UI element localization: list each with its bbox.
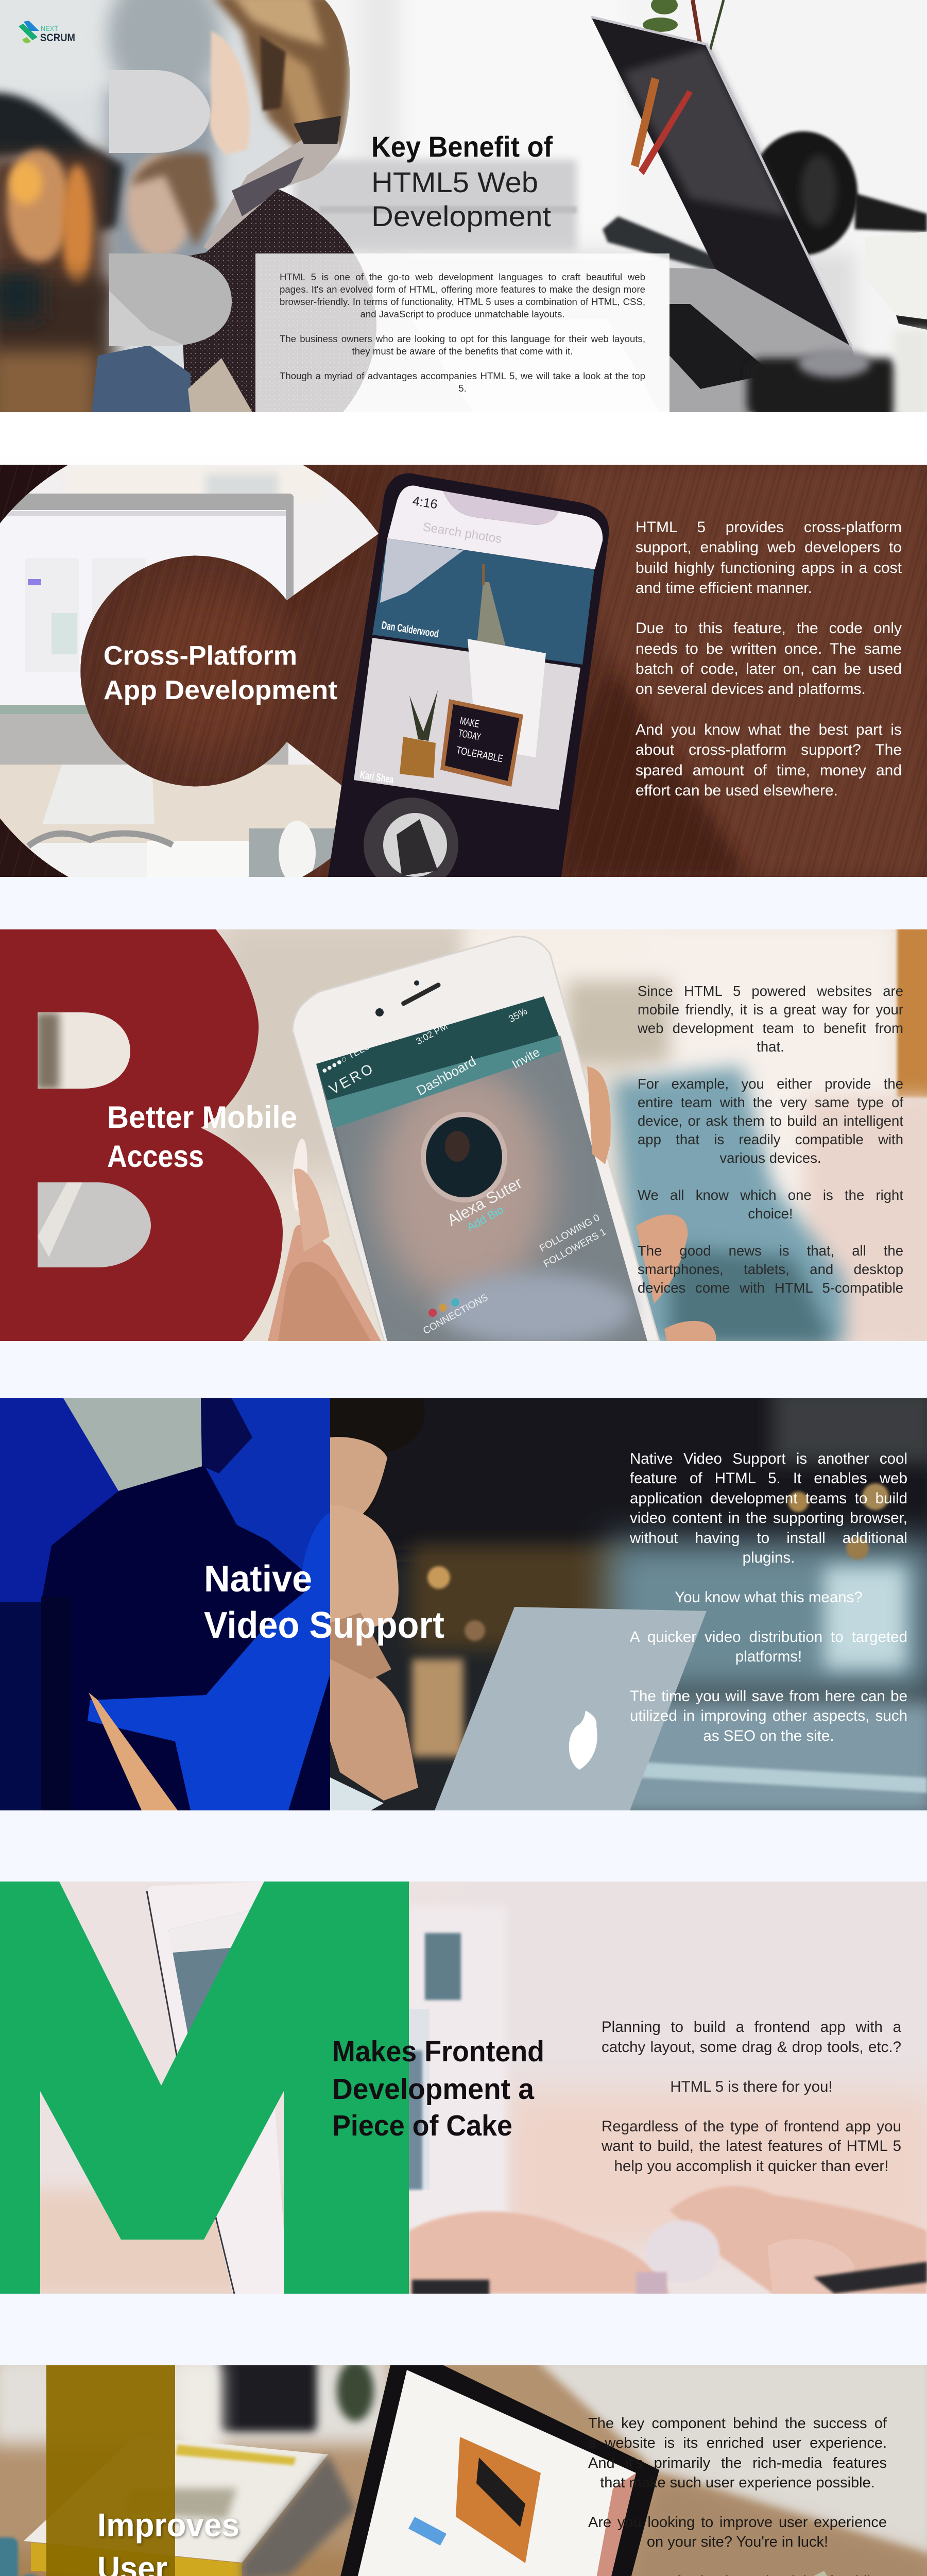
cross-platform text: and time efficient manner. [636, 580, 812, 597]
cross-platform text: Due to this feature, the code only [636, 620, 902, 637]
user experience illustration [0, 2365, 927, 2576]
native video text: plugins. [743, 1549, 795, 1566]
title [204, 1558, 444, 1646]
mobile access text [638, 983, 903, 1296]
mobile access text: web development team to benefit from [638, 1020, 903, 1036]
title: Development a [332, 2073, 535, 2106]
phone labels: Alexa Suter [444, 1174, 525, 1229]
notch [443, 491, 559, 525]
icon: laptop [77, 2365, 659, 2576]
intro text [280, 272, 645, 394]
mobile access text: mobile friendly, it is a great way for your [638, 1002, 903, 1018]
phone labels: FOLLOWERS 1 [542, 1226, 608, 1269]
intro text: they must be aware of the benefits that come with it. [352, 346, 573, 357]
mobile access text: For example, you either provide the [638, 1076, 903, 1092]
title: Video Support [204, 1605, 444, 1646]
title [97, 2506, 270, 2576]
native video text: You know what this means? [675, 1589, 863, 1606]
earpiece [401, 982, 441, 1007]
cross-platform text: support, enabling web developers to [636, 539, 902, 556]
intro text: HTML 5 is one of the go-to web development languages to craft beautiful web [280, 272, 645, 282]
frontend text: Planning to build a frontend app with a [602, 2019, 901, 2036]
yellow overlay band [46, 2365, 175, 2576]
intro text: 5. [458, 383, 467, 394]
top photo: statue [372, 538, 594, 665]
native video text: without having to install additional [630, 1530, 907, 1547]
native video text: utilized in improving other aspects, such [630, 1707, 907, 1724]
semi-transparent text panel [255, 253, 670, 412]
man, skin tones right of overlay [330, 1398, 425, 1810]
native video text [630, 1450, 907, 1744]
mobile access text: devices come with HTML 5-compatible [638, 1280, 903, 1296]
phone labels: Search photos [422, 520, 503, 546]
screen header [316, 996, 559, 1100]
title: Improves [97, 2506, 239, 2544]
phone labels: ●●●●○ TELUS LTE [319, 1028, 393, 1076]
panel: native video support [0, 1398, 927, 1810]
phone labels: Dan Calderwood [381, 619, 439, 640]
native video illustration [0, 1398, 927, 1810]
user experience text: a website is its enriched user experience. [588, 2435, 887, 2451]
native video text: The time you will save from here can be [630, 1688, 907, 1705]
frontend text: HTML 5 is there for you! [670, 2078, 833, 2095]
small gem icons [428, 1298, 459, 1317]
photo: people clipped to letter B [0, 0, 391, 433]
blurred cafe background [330, 1381, 927, 1819]
frontend text [602, 2018, 901, 2176]
phone labels: 35% [507, 1006, 529, 1025]
headphones and dark keyboard [603, 131, 927, 273]
bottom circle [364, 798, 458, 892]
cross-platform text: And you know what the best part is [636, 721, 902, 738]
user experience text: The key component behind the success of [588, 2415, 887, 2432]
cross-platform text: about cross-platform support? The [636, 741, 902, 758]
title [332, 2035, 544, 2142]
native video text: A quicker video distribution to targeted [630, 1629, 907, 1646]
avatar [421, 1112, 507, 1202]
right fingers [587, 1066, 716, 1341]
mobile access text: app that is readily compatible with [638, 1131, 903, 1147]
phone labels: Kari Shea [359, 769, 394, 786]
frontend text: want to build, the latest features of HTML 5 [602, 2138, 901, 2155]
mobile access text: device, or ask them to build an intelligent [638, 1113, 903, 1129]
native video text: video content in the supporting browser, [630, 1510, 907, 1527]
phone labels: VERO [327, 1060, 377, 1097]
mobile access text: choice! [748, 1206, 793, 1222]
mobile access text: Since HTML 5 powered websites are [638, 983, 903, 999]
title: HTML5 Web [371, 166, 538, 198]
hands and watch [409, 2186, 927, 2295]
intro text: and JavaScript to produce unmatchable layouts. [360, 309, 564, 319]
phone labels: MAKE [459, 715, 480, 730]
panel: intro hero [0, 0, 927, 412]
user experience text: Are you looking to improve user experience [588, 2514, 887, 2531]
frontend text: help you accomplish it quicker than ever! [614, 2158, 888, 2174]
phone labels: TOLERABLE [455, 744, 504, 765]
blurred room background [0, 917, 927, 1350]
mobile access illustration [0, 929, 927, 1341]
hero illustration with heading [0, 0, 927, 412]
intro text: Though a myriad of advantages accompanies HTML 5, we will take a look at the top [280, 370, 645, 381]
screen body [316, 996, 647, 1341]
panel: improves user experience [0, 2365, 927, 2576]
intro text: browser-friendly. In terms of functionality, HTML 5 uses a combination of HTML, CSS, [280, 296, 645, 307]
phone labels: FOLLOWING 0 [538, 1212, 602, 1254]
frontend text: catchy layout, some drag & drop tools, etc.? [602, 2038, 901, 2056]
bottom photo: letter board [354, 638, 580, 810]
user experience text: that make such user experience possible. [600, 2475, 875, 2491]
cross-platform text: HTML 5 provides cross-platform [636, 519, 902, 536]
desk background with books [109, 0, 855, 417]
phone labels: TODAY [457, 727, 482, 743]
native video text: as SEO on the site. [703, 1727, 834, 1744]
frontend text: Regardless of the type of frontend app you [602, 2117, 901, 2135]
mobile access text: smartphones, tablets, and desktop [638, 1261, 903, 1277]
phone labels: Invite [510, 1045, 542, 1072]
title: Better Mobile [107, 1100, 297, 1134]
phone labels: 4:16 [411, 494, 439, 512]
mobile access text: entire team with the very same type of [638, 1094, 903, 1110]
mobile access text: The good news is that, all the [638, 1243, 903, 1259]
left hand [268, 1138, 381, 1341]
book stack [24, 2436, 355, 2576]
cross-platform text [636, 519, 902, 799]
blue overlay letter N with man [0, 1398, 330, 1810]
title: App Development [104, 675, 337, 705]
cross-platform text: spared amount of time, money and [636, 762, 902, 779]
phone screen header [387, 486, 603, 569]
title: Development [371, 200, 551, 232]
logo [19, 21, 75, 44]
title: Piece of Cake [332, 2109, 512, 2142]
mug left [0, 2537, 44, 2576]
cross-platform text: effort can be used elsewhere. [636, 782, 838, 799]
phone labels: CONNECTIONS [421, 1292, 490, 1336]
panel: cross-platform [0, 465, 927, 877]
icon: laptop [435, 1607, 707, 1810]
panel: makes frontend development [0, 1882, 927, 2294]
mobile access text: various devices. [719, 1150, 821, 1166]
icon: laptop [591, 17, 860, 412]
wood background [0, 465, 927, 877]
copper cup with pen [814, 2571, 918, 2576]
native video text: feature of HTML 5. It enables web [630, 1470, 907, 1487]
phone labels: Dashboard [414, 1053, 478, 1098]
title [107, 1100, 297, 1174]
logo: NEXT [41, 24, 58, 32]
native video text: platforms! [735, 1648, 802, 1665]
photo: desktop computer clipped to letter C [0, 465, 412, 885]
user experience text [588, 2414, 887, 2576]
intro text: pages. It's an evolved form of HTML, offering more features to make the design more [280, 284, 645, 295]
phone [293, 937, 659, 1345]
cross-platform text: batch of code, later on, can be used [636, 660, 902, 677]
letter M [0, 1882, 409, 2294]
cross-platform text: build highly functioning apps in a cost [636, 560, 902, 577]
native video text: application development teams to build [630, 1490, 907, 1507]
title: Access [107, 1139, 204, 1174]
plant [643, 0, 724, 52]
cross-platform text: on several devices and platforms. [636, 681, 866, 698]
phone labels: Add Bio [465, 1203, 506, 1233]
mobile access text: We all know which one is the right [638, 1187, 903, 1203]
cross-platform illustration [0, 465, 927, 877]
mobile access text: that. [757, 1039, 784, 1055]
phone labels [359, 494, 504, 786]
title: Native [204, 1558, 312, 1600]
letter B [0, 929, 283, 1341]
laptop behind letter [147, 1882, 288, 2294]
phone [328, 473, 609, 892]
title [371, 130, 553, 232]
title: Key Benefit of [371, 130, 553, 163]
native video text: Native Video Support is another cool [630, 1450, 907, 1467]
user experience text: on your site? You're in luck! [647, 2534, 828, 2550]
phone labels: 3:02 PM [414, 1021, 450, 1046]
frontend illustration [0, 1882, 927, 2294]
intro text: The business owners who are looking to opt for this language for their web layouts, [280, 333, 645, 344]
desk and brick wall background [0, 2354, 927, 2576]
title: Cross-Platform [104, 641, 297, 671]
panel: better mobile access [0, 929, 927, 1341]
blurred desk background [0, 1870, 927, 2298]
logo: SCRUM [40, 32, 75, 44]
cross-platform text: needs to be written once. The same [636, 640, 902, 657]
phone labels [319, 1006, 608, 1336]
white book and dark lens [747, 232, 927, 420]
title [104, 641, 337, 705]
title: Makes Frontend [332, 2035, 544, 2068]
user experience text: And it's primarily the rich-media features [588, 2455, 887, 2471]
